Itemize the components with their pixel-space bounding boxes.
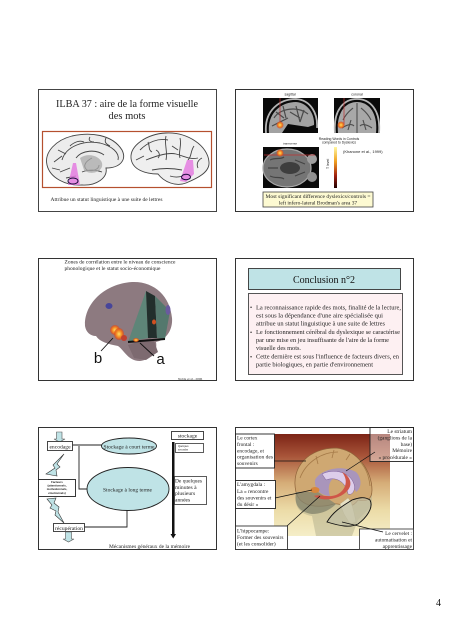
label a with line: a: [156, 351, 165, 368]
image: axial MRI: [263, 142, 319, 188]
panel: conclusion bullets: •: [250, 306, 252, 312]
slide 1: ILBA 37: [38, 90, 216, 212]
slide 3 heading: [64, 260, 176, 272]
image: anatomical head: [274, 434, 390, 536]
arrow: time axis: [170, 442, 176, 538]
label: cervelet: automatisation et: [375, 538, 412, 544]
color scale: T level: [326, 159, 330, 169]
box: quelques secondes: secondes: [178, 448, 188, 452]
color scale: [326, 147, 337, 188]
arrow: output: [63, 532, 74, 542]
panel: conclusion bullets: Cette dernière est sous l'influence de facteurs divers, en: [256, 354, 399, 360]
box: facteurs: motivationnels,: [47, 487, 67, 491]
box: stockage: [172, 432, 204, 440]
label: cortex frontal: [236, 434, 274, 468]
image: coronal MRI: [334, 92, 380, 133]
label: hippocampe: L'hippocampe:: [237, 528, 270, 534]
panel: conclusion bullets: visuelle des mots.: [256, 346, 302, 352]
arrow: input: [54, 432, 65, 442]
box: minutes to years: [174, 476, 206, 504]
box: quelques secondes: [176, 444, 204, 452]
box: facteurs: [38, 480, 76, 496]
label: hippocampe: (et les consolider): [237, 540, 276, 548]
label: striatum: [370, 428, 414, 462]
label: hippocampe: [236, 526, 288, 550]
callout: yellow: Most significant difference dyslexics/controls =: [266, 193, 370, 200]
panel: conclusion bullets: La reconnaissance rapide des mots, finalité de la lecture,: [256, 304, 402, 312]
label: cervelet: Le cervelet :: [385, 531, 412, 537]
icon: lateral brain: [131, 133, 209, 184]
image: coronal MRI: coronal: [351, 92, 363, 96]
icon: medial brain: [47, 134, 124, 185]
box: minutes to years: années: [175, 498, 190, 504]
label: amygdale: du désir »: [237, 502, 259, 508]
heading: Conclusion n°2: Conclusion n°2: [293, 275, 355, 286]
label b with line: b: [94, 350, 102, 367]
label: amygdale: L'amygdala :: [237, 482, 266, 488]
chart label: Reading Words in Controls: [319, 137, 360, 141]
box: facteurs: émotionnels): [48, 491, 66, 495]
box: minutes to years: De quelques: [175, 478, 202, 484]
label: striatum: Mémoire: [392, 448, 413, 454]
panel: conclusion bullets: Le fonctionnement cérébral du dyslexique se caractérise: [256, 329, 400, 336]
connectors: [72, 445, 127, 527]
label: cortex frontal: souvenirs: [237, 461, 258, 467]
slide 1 title: [56, 99, 198, 122]
slide 5: memory diagram: [38, 428, 216, 550]
label: cervelet: [360, 529, 414, 550]
icon: lightning bottom: [47, 498, 64, 523]
page number: 4: [436, 598, 441, 609]
label: cortex frontal: Le cortex: [237, 436, 258, 442]
box: récupération: récupération: [55, 526, 83, 532]
callout: yellow: left infero-lateral Brodman's area 37: [279, 200, 357, 206]
icon: lightning top: [46, 454, 64, 476]
label: striatum: (ganglions de la: [378, 434, 413, 442]
box: minutes to years: minutes à: [175, 485, 197, 491]
panel: conclusion bullets: •: [250, 355, 252, 361]
label: cortex frontal: frontal :: [237, 441, 255, 448]
box: facteurs: (attentionnels,: [47, 484, 67, 488]
label: amygdale: La « rencontre: [237, 489, 269, 495]
ellipse: long-term storage: [87, 468, 169, 510]
slide 6: brain memory anatomy: [236, 428, 414, 550]
heading: Conclusion n°2: [248, 268, 400, 290]
panel: conclusion bullets: [248, 294, 402, 374]
caption: Mécanismes généraux de la mémoire: [109, 544, 190, 550]
leader lines: [274, 452, 383, 532]
label a with line: [140, 343, 165, 368]
image: sagittal MRI: [263, 92, 318, 133]
box: facteurs: Facteurs: [51, 480, 63, 484]
slide 1 title: des mots: [108, 111, 146, 122]
image: axial MRI: transverse: [283, 142, 297, 146]
box: stockage: stockage: [178, 434, 198, 440]
ellipse: long-term storage: Stockage à long terme: [103, 488, 152, 494]
slide 3 heading: Zones de corrélation entre le niveau de conscience: [64, 260, 176, 266]
label: cervelet: apprentissage: [383, 544, 413, 550]
ellipse: short-term storage: [102, 438, 156, 454]
slide 2: imaging: [236, 90, 414, 212]
label: cortex frontal: encodage, et: [237, 448, 264, 454]
ellipse: short-term storage: Stockage à court terme: [104, 444, 155, 450]
panel: conclusion bullets: partie biologiques, en partie d'environnement: [256, 362, 373, 368]
box: minutes to years: plusieurs: [175, 491, 195, 497]
panel: conclusion bullets: par une mise en jeu insuffisante de l'aire de la forme: [256, 337, 389, 344]
label: cortex frontal: organisation des: [237, 454, 273, 460]
citation: Noble et al., 2006: [178, 377, 203, 382]
label: hippocampe: Former des souvenirs: [237, 535, 283, 541]
label: amygdale: des souvenirs et: [237, 496, 272, 502]
box: encodage: encodage: [49, 444, 71, 450]
slide 4: conclusion: [236, 258, 414, 380]
panel: conclusion bullets: attribue un statut linguistique à une suite de lettres: [256, 322, 386, 328]
panel: conclusion bullets: •: [250, 330, 252, 336]
label: striatum: « procédurale »: [378, 455, 412, 461]
box: récupération: [54, 524, 84, 532]
slide 1 title: ILBA 37 : aire de la forme visuelle: [56, 99, 198, 110]
box: quelques secondes: Quelques: [178, 445, 189, 448]
chart label: compared to Dyslexics: [322, 140, 356, 144]
slide 3: correlation brain: [38, 258, 216, 382]
box: encodage: [48, 442, 72, 450]
label b with line: [94, 338, 113, 367]
panel: conclusion bullets: est sous la dépendance d'une aire spécialisée qui: [256, 314, 383, 320]
label: striatum: Le striatum: [387, 429, 413, 435]
label: striatum: base): [401, 441, 412, 448]
citation: (Khanone et al., 1999): [343, 149, 383, 154]
red frame with brain diagrams: [42, 132, 212, 188]
chart label: [319, 137, 360, 144]
callout: yellow: [263, 192, 373, 207]
image: sagittal MRI: sagittal: [284, 92, 296, 96]
slide 3 heading: phonologique et le statut socio-économique: [64, 267, 161, 272]
label: amygdale: [236, 480, 276, 508]
image: 3D brain: [85, 282, 172, 361]
slide 1 caption: Attribue un statut linguistique à une suite de lettres: [50, 198, 163, 203]
